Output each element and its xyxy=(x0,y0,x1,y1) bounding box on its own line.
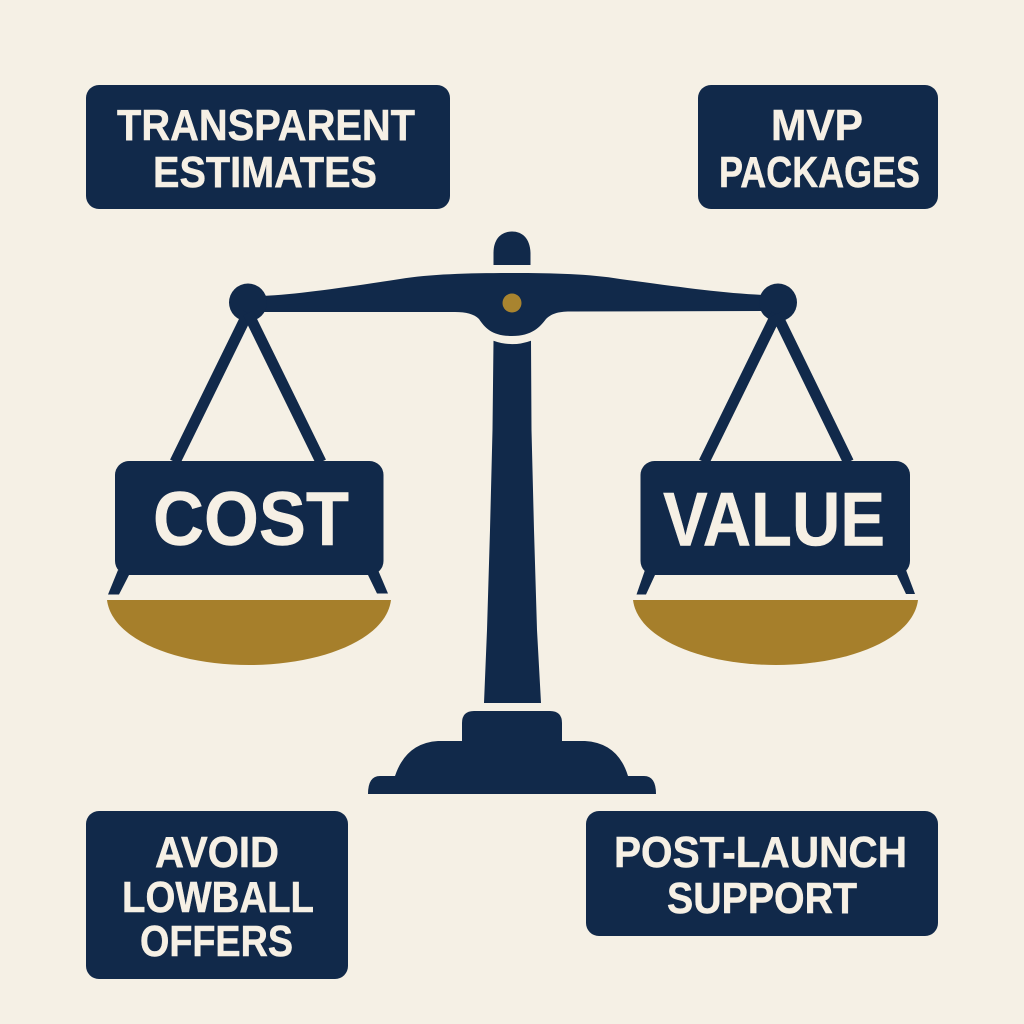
callout: avoid lowball offers: AVOID xyxy=(155,828,279,877)
right pivot xyxy=(759,284,797,322)
callout: post-launch support xyxy=(586,811,938,936)
left pan connectors xyxy=(108,570,388,594)
callout: transparent estimates: TRANSPARENT xyxy=(117,101,415,150)
scale base xyxy=(368,711,656,794)
scale beam xyxy=(262,273,764,336)
callout: post-launch support: SUPPORT xyxy=(667,874,857,923)
left sign: cost xyxy=(115,461,384,575)
callout: avoid lowball offers xyxy=(86,811,348,979)
left sign: cost: COST xyxy=(153,477,349,562)
left gold pan xyxy=(107,600,391,665)
right gold pan xyxy=(633,600,918,665)
scale column xyxy=(484,341,541,703)
callout: MVP packages: MVP xyxy=(771,101,863,150)
right sign: value: VALUE xyxy=(663,478,885,562)
left hanging strings xyxy=(175,313,321,462)
callout: transparent estimates xyxy=(86,85,450,209)
callout: avoid lowball offers: OFFERS xyxy=(140,917,293,966)
callout: MVP packages: PACKAGES xyxy=(719,148,920,197)
right pan connectors xyxy=(636,570,915,594)
center gold pin xyxy=(502,294,522,312)
callout: transparent estimates: ESTIMATES xyxy=(153,148,377,197)
right hanging strings xyxy=(704,314,848,462)
callout: avoid lowball offers: LOWBALL xyxy=(122,873,314,922)
left pivot xyxy=(229,284,267,322)
right sign: value xyxy=(640,461,910,575)
callout: MVP packages xyxy=(698,85,938,209)
scale post top xyxy=(494,232,530,265)
callout: post-launch support: POST-LAUNCH xyxy=(614,828,907,877)
